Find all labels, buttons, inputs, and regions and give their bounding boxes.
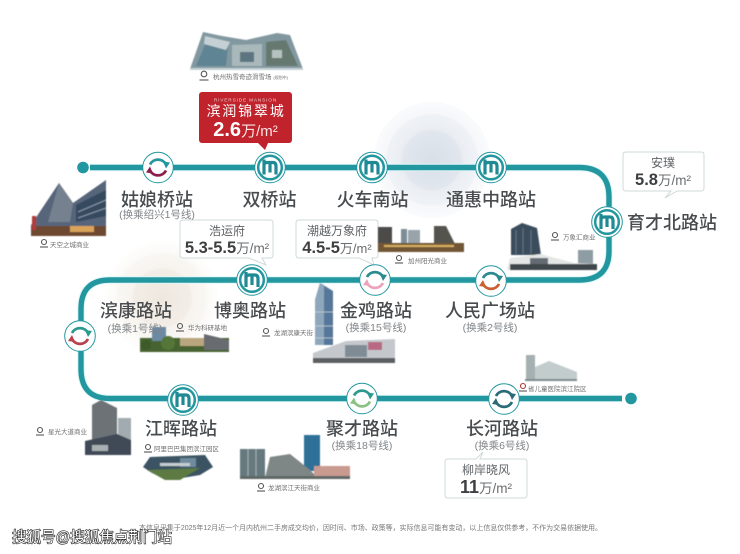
station icon: 滨康路站 transfer [65, 321, 95, 351]
location label: ski resort [200, 71, 289, 81]
location label: 华为科研基地 [176, 323, 228, 332]
station icon: 通惠中路站 metro [476, 152, 506, 183]
decorative halo: beige [105, 241, 219, 355]
station label: 长河路站: 长河路站 [466, 419, 538, 439]
station icon: 江晖路站 metro [168, 385, 198, 415]
callout: 柳岸晓风: 柳岸晓风 [462, 463, 510, 477]
callout: 安璞: 安璞 [651, 155, 675, 170]
location label: 龙湖滨江天街商业 [257, 483, 320, 492]
station label: 滨康路站 [100, 301, 172, 335]
decorative halo: blue [374, 102, 490, 218]
station label: 长河路站: (换乘6号线) [475, 439, 529, 452]
station label: 长河路站 [466, 419, 538, 452]
station label: 双桥站: 双桥站 [242, 190, 296, 210]
station label: 人民广场站 [445, 301, 535, 334]
project callout: 滨润锦翠城: RIVERSIDE MANSION [214, 98, 277, 104]
station label: 金鸡路站 [340, 301, 412, 334]
callout: 浩运府: 浩运府 [209, 223, 245, 238]
station icon: 育才北路站 metro [592, 207, 622, 237]
station label: 博奥路站: 博奥路站 [214, 301, 286, 321]
station label: 姑娘桥站: (换乘绍兴1号线) [119, 208, 195, 221]
station label: 金鸡路站: 金鸡路站 [340, 301, 412, 321]
station label: 金鸡路站: (换乘15号线) [346, 321, 406, 334]
callout: 潮越万象府 [296, 220, 378, 265]
location label: 省儿童医院滨江院区: 省儿童医院滨江院区 [528, 384, 587, 393]
station icon: 人民广场站 transfer [476, 266, 506, 296]
location label: 加州阳光商业 [395, 256, 448, 265]
metro line [77, 162, 637, 404]
location label: 阿里巴巴集团滨江园区 [144, 444, 220, 453]
callout: 浩运府: 5.3-5.5万/m² [185, 239, 270, 257]
station label: 聚才路站: (换乘18号线) [332, 439, 392, 452]
location label: 万象汇商业 [551, 232, 596, 242]
location label: 龙湖滨康天街: 龙湖滨康天街 [274, 328, 314, 337]
station label: 人民广场站: 人民广场站 [445, 301, 535, 321]
callout: 柳岸晓风 [445, 452, 527, 498]
station label: 育才北路站: 育才北路站 [627, 213, 717, 233]
location label: 星光大道商业: 星光大道商业 [48, 427, 88, 436]
station label: 滨康路站: (换乘1号线) [108, 322, 162, 335]
image: 龙湖滨康天街 tower [313, 283, 395, 363]
location label: 华为科研基地: 华为科研基地 [188, 323, 228, 332]
footnote: 本信息采集于2025年12月近一个月内杭州二手房成交均价，因时间、市场、政策等，实际信息可能有变动，以上信息仅供参考，不作为交易依据使用。 [139, 523, 602, 532]
location label: 天空之城商业: 天空之城商业 [50, 240, 90, 249]
station label: 姑娘桥站 [119, 190, 195, 221]
location label: 阿里巴巴集团滨江园区: 阿里巴巴集团滨江园区 [154, 444, 220, 453]
image: 天空之城商业 [31, 180, 106, 236]
station icon: 金鸡路站 transfer [360, 265, 390, 295]
project callout: 滨润锦翠城 [199, 92, 292, 150]
station label: 通惠中路站: 通惠中路站 [446, 190, 536, 210]
station label: 江晖路站: 江晖路站 [145, 419, 217, 439]
station icon: 长河路站 transfer [489, 384, 519, 414]
station label: 姑娘桥站: 姑娘桥站 [121, 190, 193, 210]
callout: 安璞: 5.8万/m² [635, 171, 691, 189]
station label: 人民广场站: (换乘2号线) [463, 321, 517, 334]
callout: 潮越万象府: 4.5-5万/m² [302, 239, 372, 257]
image: 省儿童医院滨江院区 [525, 355, 577, 381]
station icon: 火车南站 metro [357, 152, 387, 183]
station icon: 双桥站 metro [255, 152, 285, 183]
image: 华为科研基地 [140, 327, 229, 352]
project callout: 滨润锦翠城: 滨润锦翠城 [206, 103, 286, 119]
callout: 潮越万象府: 潮越万象府 [307, 223, 367, 238]
image: 万象汇商业 [507, 223, 597, 270]
station label: 滨康路站: 滨康路站 [100, 301, 172, 321]
station label: 聚才路站 [326, 419, 398, 452]
station icon: 博奥路站 metro [237, 265, 267, 295]
location label: 万象汇商业: 万象汇商业 [563, 232, 596, 242]
location label: 天空之城商业 [40, 240, 90, 249]
location label: 星光大道商业 [36, 427, 88, 436]
location label: 省儿童医院滨江院区 [519, 384, 587, 393]
image: 阿里巴巴集团滨江园区 [143, 455, 213, 480]
station icon: 聚才路站 transfer [347, 383, 377, 414]
image: aerial ski resort [190, 32, 303, 70]
image: 星光大道商业 [85, 400, 131, 455]
image: 龙湖滨江天街商业 [240, 435, 350, 479]
callout: 柳岸晓风: 11万/m² [460, 477, 513, 497]
callout: 安璞 [623, 152, 704, 198]
location label: 龙湖滨江天街商业: 龙湖滨江天街商业 [268, 483, 320, 492]
project callout: 滨润锦翠城: 2.6万/m² [213, 119, 278, 141]
station label: 火车南站: 火车南站 [336, 190, 408, 210]
location label: 龙湖滨康天街 [262, 328, 314, 337]
location label: 加州阳光商业: 加州阳光商业 [408, 256, 448, 265]
location label: ski resort: 杭州热雪奇迹滑雪场 (规划中) [213, 72, 289, 81]
callout: 浩运府 [180, 220, 273, 265]
watermark: 搜狐号@搜狐焦点荆门站 [12, 529, 172, 546]
station icon: 姑娘桥站 transfer [143, 152, 173, 183]
image: 加州阳光商业 [378, 226, 464, 252]
station label: 聚才路站: 聚才路站 [326, 419, 398, 439]
